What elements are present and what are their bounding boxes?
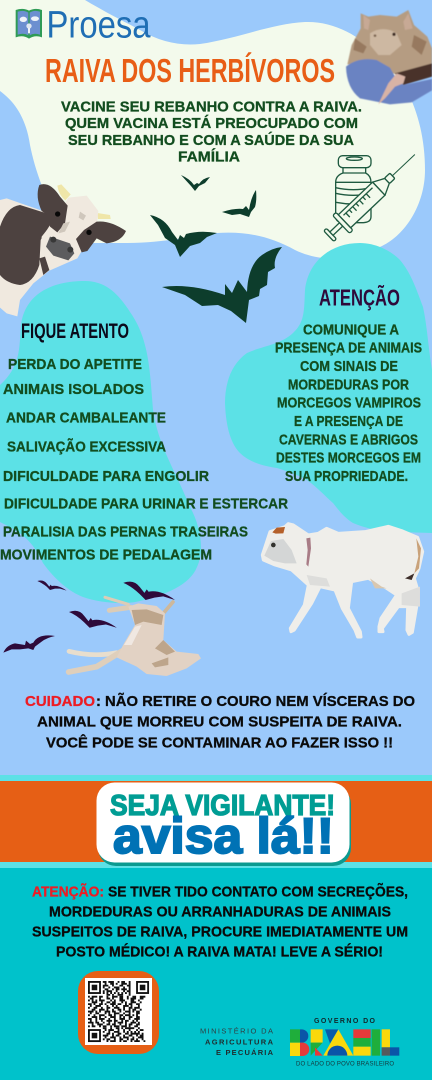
callout: cuidado: ANIMAL QUE MORREU COM SUSPEITA DE RAIVA. (37, 714, 402, 731)
logo: governo do brasil: GOVERNO DO (314, 1018, 376, 1025)
icon: cow (0, 184, 126, 316)
cow dark patch (0, 205, 53, 285)
brasil colour blocks (290, 1029, 399, 1056)
list: signs of rabies: SALIVAÇÃO EXCESSIVA (7, 438, 166, 456)
icon: bat small top (181, 175, 210, 191)
text block: comunique: MORDEDURAS POR (288, 377, 409, 393)
callout: cuidado: VOCÊ PODE SE CONTAMINAR AO FAZER ISSO !! (46, 733, 393, 751)
cow nose (46, 237, 74, 260)
text block: comunique (275, 322, 422, 485)
banner line 2: avisa lá!! (113, 808, 334, 864)
cow head (41, 196, 98, 270)
icon: purple bat b (123, 582, 175, 600)
icon: purple bat d (3, 635, 55, 653)
background blob: cream (0, 0, 425, 259)
text block: atenção contato: ATENÇÃO: (32, 883, 104, 901)
wordmark: Proesa (46, 4, 151, 46)
list: signs of rabies: DIFICULDADE PARA URINAR E ESTERCAR (4, 496, 289, 512)
photo: standing white calf (262, 524, 423, 637)
icon: purple bat c (69, 611, 117, 628)
text block: atenção contato: SUSPEITOS DE RAIVA, PROCURE IMEDIATAMENTE UM (32, 924, 408, 941)
intro text (61, 100, 362, 166)
QR code (78, 971, 159, 1054)
list: signs of rabies: PERDA DO APETITE (8, 357, 142, 373)
callout: cuidado: CUIDADO (25, 693, 95, 710)
logo: ministério: AGRICULTURA (205, 1038, 274, 1046)
list: signs of rabies: ANDAR CAMBALEANTE (6, 411, 166, 427)
text block: atenção contato: POSTO MÉDICO! A RAIVA MATA! LEVE A SÉRIO! (56, 944, 383, 961)
cow eyes (55, 211, 60, 217)
logo: ministério (200, 1026, 274, 1057)
icon: bat right (222, 190, 256, 217)
text block: atenção contato: MORDEDURAS OU ARRANHADURAS DE ANIMAIS (49, 904, 391, 921)
panel background: atenção blob (225, 243, 432, 533)
cow horns (57, 184, 111, 219)
callout: cuidado: : NÃO RETIRE O COURO NEM VÍSCERAS DO (96, 692, 415, 710)
banner: seja vigilante (96, 782, 351, 866)
list: signs of rabies: ANIMAIS ISOLADOS (3, 382, 144, 398)
icon: book logo (16, 9, 42, 39)
banner line 1: SEJA VIGILANTE! (110, 790, 335, 822)
intro text: QUEM VACINA ESTÁ PREOCUPADO COM (65, 115, 358, 132)
icon: purple bat a (37, 581, 67, 591)
list: signs of rabies: DIFICULDADE PARA ENGOLIR (3, 469, 210, 485)
heading: fique atento: FIQUE ATENTO (21, 320, 129, 343)
panel background: fique atento blob (0, 281, 201, 603)
photo: vampire bat (346, 10, 432, 104)
heading: atenção: ATENÇÃO (319, 284, 400, 311)
intro text: FAMÍLIA (178, 149, 241, 166)
icon: vaccine vial and syringe (320, 146, 423, 245)
text block: comunique: COMUNIQUE A (303, 322, 399, 338)
logo: ministério: MINISTÉRIO DA (200, 1026, 273, 1036)
logo: governo do brasil (290, 1018, 399, 1068)
text block: atenção contato: SE TIVER TIDO CONTATO COM SECREÇÕES, (108, 883, 408, 901)
cow body (0, 198, 83, 316)
icon: bat large (162, 247, 282, 323)
intro text: SEU REBANHO E COM A SAÚDE DA SUA (68, 131, 355, 149)
text block: comunique: SUA PROPRIEDADE. (285, 469, 408, 485)
text block: atenção contato (32, 883, 408, 961)
list: signs of rabies (0, 357, 289, 563)
logo: ministério: E PECUÁRIA (216, 1048, 274, 1057)
text block: comunique: E A PRESENÇA DE (294, 414, 403, 430)
photo: fallen calf (69, 597, 201, 676)
intro text: VACINE SEU REBANHO CONTRA A RAIVA. (61, 100, 362, 116)
text block: comunique: COM SINAIS DE (300, 359, 398, 375)
list: signs of rabies: MOVIMENTOS DE PEDALAGEM (0, 547, 212, 563)
list: signs of rabies: PARALISIA DAS PERNAS TRASEIRAS (3, 525, 248, 541)
bottom band (0, 775, 432, 1080)
logo: governo do brasil: DO LADO DO POVO BRASILEIRO (296, 1062, 394, 1068)
icon: bat middle (150, 215, 217, 257)
callout: cuidado (25, 692, 415, 751)
logo: Proesa (16, 4, 151, 46)
